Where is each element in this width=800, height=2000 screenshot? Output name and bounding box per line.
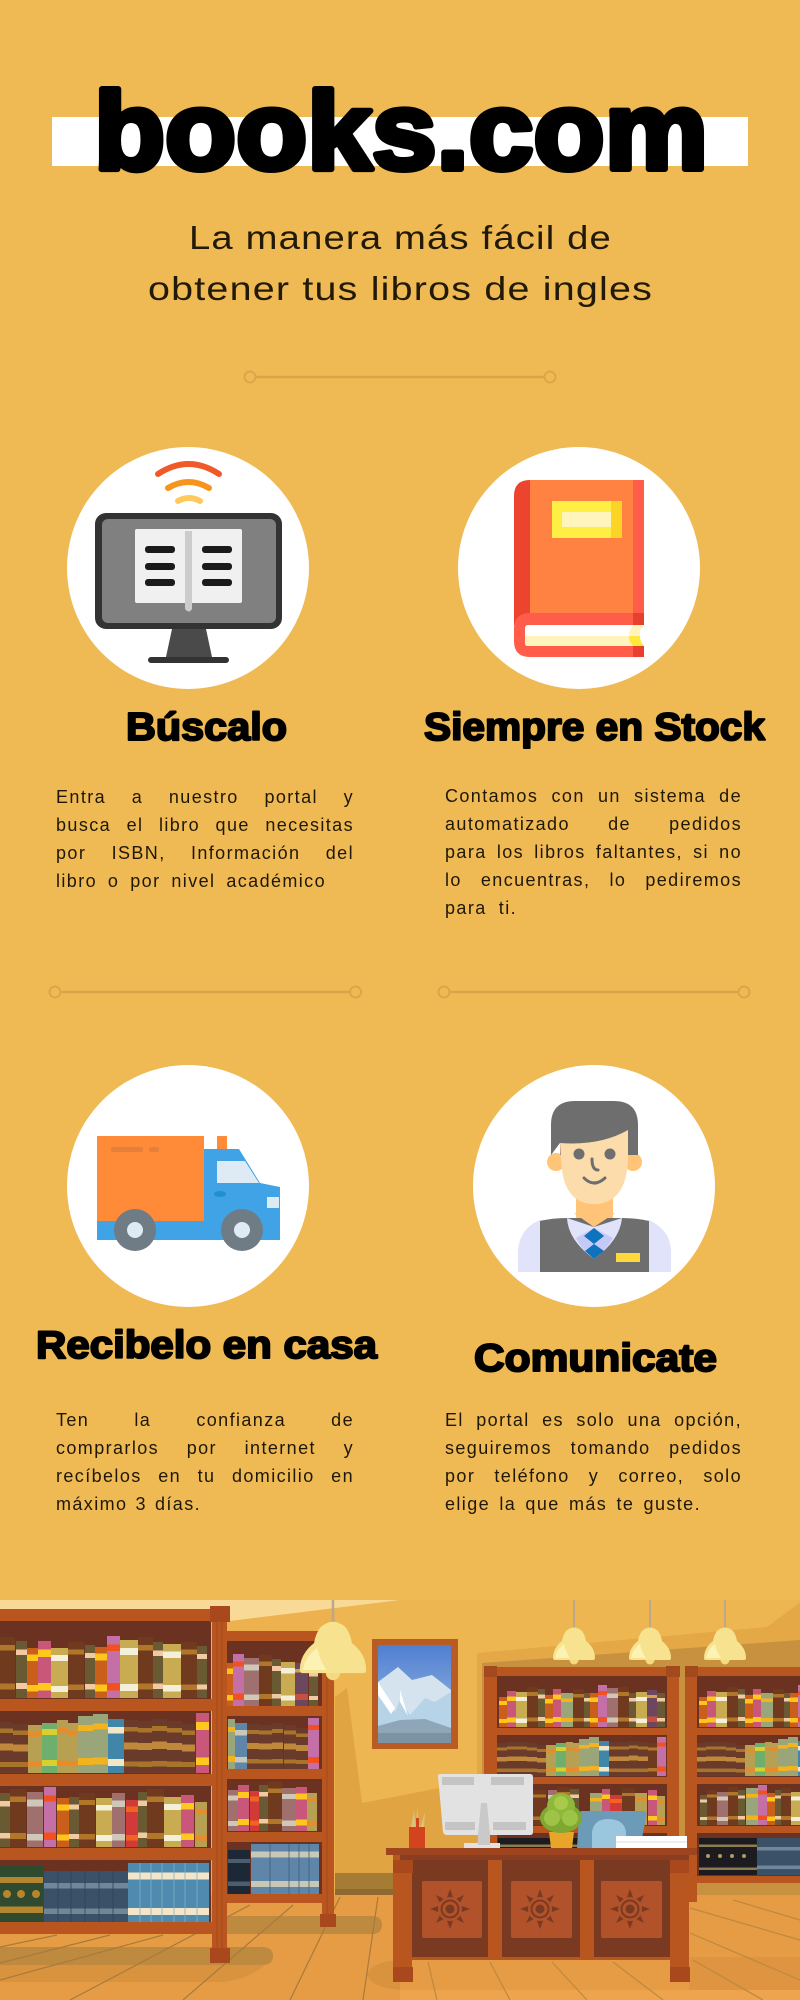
text block: Siempre en Stock description: para ti.	[445, 898, 517, 918]
text block: Comunicate description: El portal es solo una opción,	[445, 1410, 742, 1430]
text block: Recibelo en casa description	[56, 1410, 354, 1514]
stack of papers	[616, 1836, 687, 1848]
subtitle: La manera más fácil de	[189, 219, 612, 256]
text block: Comunicate description: por teléfono y correo, solo	[445, 1466, 742, 1486]
text block: Siempre en Stock description: lo encuentras, lo pediremos	[445, 870, 742, 890]
text block: Búscalo description	[56, 787, 354, 891]
text block: Siempre en Stock description: Contamos con un sistema de	[445, 786, 742, 806]
heading: Comunicate: Comunicate	[474, 1337, 717, 1380]
hanging lamp: large	[300, 1600, 366, 1680]
text block: Comunicate description	[445, 1410, 742, 1514]
pencil cup	[409, 1808, 425, 1848]
text block: Búscalo description: libro o por nivel académico	[56, 871, 326, 891]
computer monitor	[438, 1774, 533, 1848]
floor with planks	[0, 1895, 800, 2000]
text block: Búscalo description: busca el libro que necesitas	[56, 815, 354, 835]
framed mountain picture	[372, 1639, 458, 1749]
text block: Siempre en Stock description: automatizado de pedidos	[445, 814, 742, 834]
subtitle	[148, 219, 653, 307]
text block: Búscalo description: por ISBN, Información del	[56, 843, 354, 863]
desk	[386, 1848, 697, 1982]
icon: customer service man	[473, 1065, 715, 1307]
heading: Recibelo en casa: Recibelo en casa	[36, 1324, 377, 1367]
text block: Recibelo en casa description: comprarlos por internet y	[56, 1438, 354, 1458]
icon: delivery truck	[67, 1065, 309, 1307]
text block: Comunicate description: seguiremos tomando pedidos	[445, 1438, 742, 1458]
chair	[577, 1811, 647, 1848]
bookcase: middle left	[227, 1631, 336, 1927]
text block: Recibelo en casa description: máximo 3 días.	[56, 1494, 201, 1514]
heading: Siempre en Stock: Siempre en Stock	[424, 706, 765, 749]
hanging lamps: right	[553, 1600, 746, 1664]
bookcase: back right	[484, 1666, 680, 1902]
title: books.com with white bar: books.com	[94, 70, 708, 190]
text block: Comunicate description: elige la que más te guste.	[445, 1494, 701, 1514]
text block: Búscalo description: Entra a nuestro portal y	[56, 787, 354, 807]
bookcase: far right	[685, 1666, 800, 1902]
potted plant	[540, 1793, 582, 1848]
wall	[0, 1600, 800, 1900]
subtitle: obtener tus libros de ingles	[148, 270, 653, 307]
text block: Siempre en Stock description: para los libros faltantes, si no	[445, 842, 742, 862]
illustration: library scene	[0, 1600, 800, 2000]
text block: Recibelo en casa description: recíbelos en tu domicilio en	[56, 1466, 354, 1486]
text block: Recibelo en casa description: Ten la confianza de	[56, 1410, 354, 1430]
icon: orange book	[458, 447, 700, 689]
icon: monitor with open book and wifi	[67, 447, 309, 689]
bookcase: large left	[0, 1606, 230, 1963]
heading: Búscalo: Búscalo	[126, 706, 287, 749]
text block: Siempre en Stock description	[445, 786, 742, 918]
